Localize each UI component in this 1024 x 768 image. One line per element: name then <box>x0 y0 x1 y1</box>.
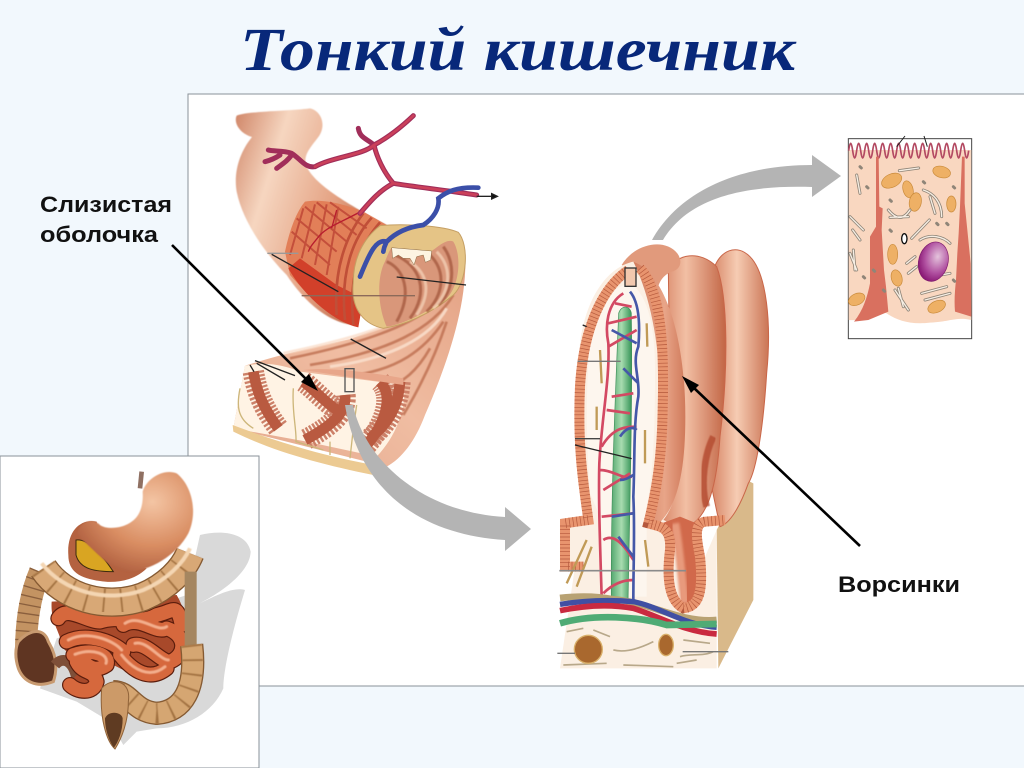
stomach underside <box>68 521 147 582</box>
cell body <box>849 150 971 323</box>
vesicle <box>902 234 907 244</box>
lower mucosal folds <box>233 252 465 467</box>
lumen <box>379 241 458 327</box>
ascending colon folds <box>26 572 40 652</box>
cell junction left <box>854 157 888 322</box>
microvilli <box>849 143 969 158</box>
nerve bundle small <box>659 634 673 656</box>
longitudinal muscle layer <box>285 201 387 327</box>
small intestine mass <box>52 595 188 697</box>
mucosal villi section <box>233 364 404 475</box>
leader lines <box>557 325 728 653</box>
front villus rounded side <box>633 262 685 523</box>
base fibres <box>563 628 713 667</box>
label: villi: Ворсинки <box>838 572 960 597</box>
tan ring wall <box>353 225 465 328</box>
stomach <box>77 472 193 572</box>
front villus outer body <box>560 262 717 668</box>
cut mucosa fringe <box>392 248 432 265</box>
ascending colon <box>26 572 40 652</box>
lumen fold highlights <box>410 252 448 315</box>
frame and cytoplasm <box>848 139 972 339</box>
illustration: epithelial cell <box>846 136 972 339</box>
back villus <box>705 250 769 527</box>
label: mucosa <box>40 192 172 247</box>
organelles <box>850 167 955 310</box>
illustration: intestine section <box>233 108 497 475</box>
green lymph vessel <box>611 307 632 603</box>
blood vessels <box>265 116 478 277</box>
shadow <box>40 533 251 745</box>
label: mucosa: Слизистая <box>40 192 172 217</box>
arrow: pointing to mucosa <box>172 245 318 391</box>
illustration: digestive organs <box>16 472 251 749</box>
liver fragment <box>76 540 113 572</box>
cecum <box>16 632 56 684</box>
arrow: gray, from villus to cell <box>652 155 841 240</box>
submucosal vessels <box>560 597 717 634</box>
middle villus <box>653 256 726 597</box>
epithelium <box>565 268 725 608</box>
rear top of front villus <box>622 244 680 310</box>
illustration: villi <box>557 244 769 668</box>
capillary network <box>599 292 639 600</box>
lumen of front villus <box>587 283 655 597</box>
upper descending colon <box>173 572 209 648</box>
nerve bundle large <box>574 635 602 663</box>
rectum end <box>101 682 129 749</box>
label: mucosa: оболочка <box>40 222 159 247</box>
selection rectangle <box>625 268 636 286</box>
title: Тонкий кишечник <box>240 17 797 84</box>
small intestine <box>58 610 182 691</box>
leader lines <box>250 194 497 380</box>
nucleus <box>914 239 953 285</box>
mitochondria <box>846 164 956 316</box>
lumen folds <box>387 247 452 322</box>
arrow: gray, from mucosa to villus <box>345 405 531 551</box>
arrow: pointing to villi <box>682 376 860 546</box>
cell junction right <box>955 157 971 317</box>
appendix region <box>55 660 77 678</box>
leader lines <box>897 136 927 147</box>
panel: digestive organs <box>0 456 259 768</box>
descending colon and rectum <box>113 645 193 713</box>
outer intestine tube <box>236 108 387 325</box>
selection rectangle <box>345 369 354 392</box>
esophagus <box>140 472 142 488</box>
connective fibres <box>567 323 648 587</box>
fold shadow <box>704 437 713 507</box>
crypt <box>662 517 704 608</box>
transverse colon <box>42 548 190 602</box>
rectum opening <box>105 713 123 748</box>
side wall of block <box>717 478 753 668</box>
panel: main diagram <box>188 94 1024 686</box>
